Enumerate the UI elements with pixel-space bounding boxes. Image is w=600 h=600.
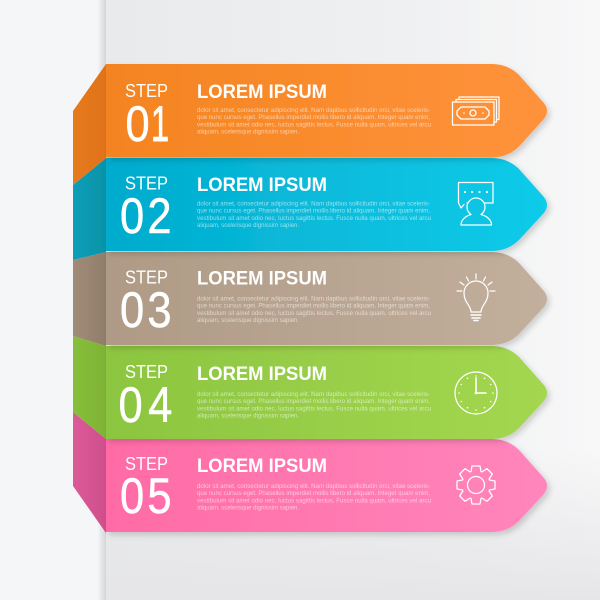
step 03 arrow band	[106, 252, 547, 345]
step 04 title: LOREM IPSUM	[197, 364, 327, 385]
step 04 label: STEP	[125, 361, 168, 382]
background: left panel	[0, 0, 106, 600]
step 05 fold	[73, 412, 106, 533]
step 01 label: STEP	[125, 80, 168, 101]
step 01 body text: vestibulum sit amet odio nec, luctus sagittis lectus. Fusce nulla quam, ultrices vel arcu	[197, 121, 431, 128]
step 05 body text: que nunc cursus eget. Phasellus imperdiet mollis libero id aliquam. Integer quam enim,	[197, 490, 430, 497]
step 03 number: 03	[120, 282, 172, 338]
step 04 body text	[197, 391, 431, 420]
panel: step 02	[73, 158, 547, 260]
step 02 body text: vestibulum sit amet odio nec, luctus sagittis lectus. Fusce nulla quam, ultrices vel arcu	[197, 215, 431, 222]
icon: clock	[455, 372, 497, 414]
step 04 fold	[73, 336, 106, 439]
step 05 body text: vestibulum sit amet odio nec, luctus sagittis lectus. Fusce nulla quam, ultrices vel arcu	[197, 497, 431, 504]
step 01 title: LOREM IPSUM	[197, 82, 327, 103]
panel: step 03	[73, 252, 547, 346]
step 01 arrow band	[106, 64, 547, 158]
icon: banknotes	[452, 97, 499, 125]
step 02 body text	[197, 200, 431, 229]
step 04 body text: que nunc cursus eget. Phasellus imperdiet mollis libero id aliquam. Integer quam enim,	[197, 398, 430, 405]
step 02 fold	[73, 158, 106, 260]
step 02 arrow band	[106, 158, 547, 251]
step 04 arrow band	[106, 346, 547, 439]
step 03 body text: aliquam, scelerisque dignissim sapien.	[197, 317, 299, 324]
step 02 body text: que nunc cursus eget. Phasellus imperdiet mollis libero id aliquam. Integer quam enim,	[197, 208, 430, 215]
step 01 fold	[73, 64, 106, 185]
panel: step 05	[73, 412, 547, 533]
step 01 number: 1	[151, 96, 169, 152]
step 05 title: LOREM IPSUM	[197, 456, 327, 477]
step 03 fold	[73, 252, 106, 346]
step 04 body text: dolor sit amet, consectetur adipiscing elit. Nam dapibus sollicitudin orci, vitae sceleris-	[197, 391, 430, 398]
step 03 body text	[197, 296, 431, 324]
step 01 number	[126, 96, 169, 152]
step 03 body text: que nunc cursus eget. Phasellus imperdiet mollis libero id aliquam. Integer quam enim,	[197, 303, 430, 310]
step 01 body text: aliquam, scelerisque dignissim sapien.	[197, 129, 299, 136]
step 05 body text: dolor sit amet, consectetur adipiscing elit. Nam dapibus sollicitudin orci, vitae sceleris-	[197, 483, 430, 490]
step 03 body text: dolor sit amet, consectetur adipiscing elit. Nam dapibus sollicitudin orci, vitae sceleris-	[197, 296, 430, 302]
panel: step 04	[73, 336, 547, 439]
step 03 title: LOREM IPSUM	[197, 268, 327, 290]
step 01 body text: que nunc cursus eget. Phasellus imperdiet mollis libero id aliquam. Integer quam enim,	[197, 114, 430, 121]
icon: person with speech bubble	[458, 182, 493, 225]
step 01 number: 0	[126, 96, 150, 152]
step 02 body text: dolor sit amet, consectetur adipiscing elit. Nam dapibus sollicitudin orci, vitae sceleris-	[197, 200, 430, 208]
step 01 body text	[197, 107, 431, 136]
step 04 body text: vestibulum sit amet odio nec, luctus sagittis lectus. Fusce nulla quam, ultrices vel arcu	[197, 405, 431, 412]
icon: gear	[457, 466, 495, 504]
step 05 arrow band	[106, 439, 547, 532]
step 05 label: STEP	[125, 453, 168, 474]
step 03 body text: vestibulum sit amet odio nec, luctus sagittis lectus. Fusce nulla quam, ultrices vel arcu	[197, 310, 431, 317]
step 02 title: LOREM IPSUM	[197, 175, 327, 196]
step 02 label: STEP	[125, 172, 168, 194]
panel: step 01	[73, 64, 547, 185]
step 02 body text: aliquam, scelerisque dignissim sapien.	[197, 222, 299, 229]
step 05 body text: aliquam, scelerisque dignissim sapien.	[197, 505, 299, 512]
step 02 number: 02	[120, 188, 172, 244]
step 03 label: STEP	[125, 266, 168, 288]
step 01 body text: dolor sit amet, consectetur adipiscing elit. Nam dapibus sollicitudin orci, vitae sceleris-	[197, 107, 430, 114]
step 04 number: 04	[118, 377, 172, 433]
step 04 body text: aliquam, scelerisque dignissim sapien.	[197, 413, 299, 420]
panel edge shadow	[98, 0, 106, 600]
step 05 number: 05	[120, 468, 172, 524]
step 05 body text	[197, 483, 431, 512]
icon: light bulb	[457, 274, 495, 320]
